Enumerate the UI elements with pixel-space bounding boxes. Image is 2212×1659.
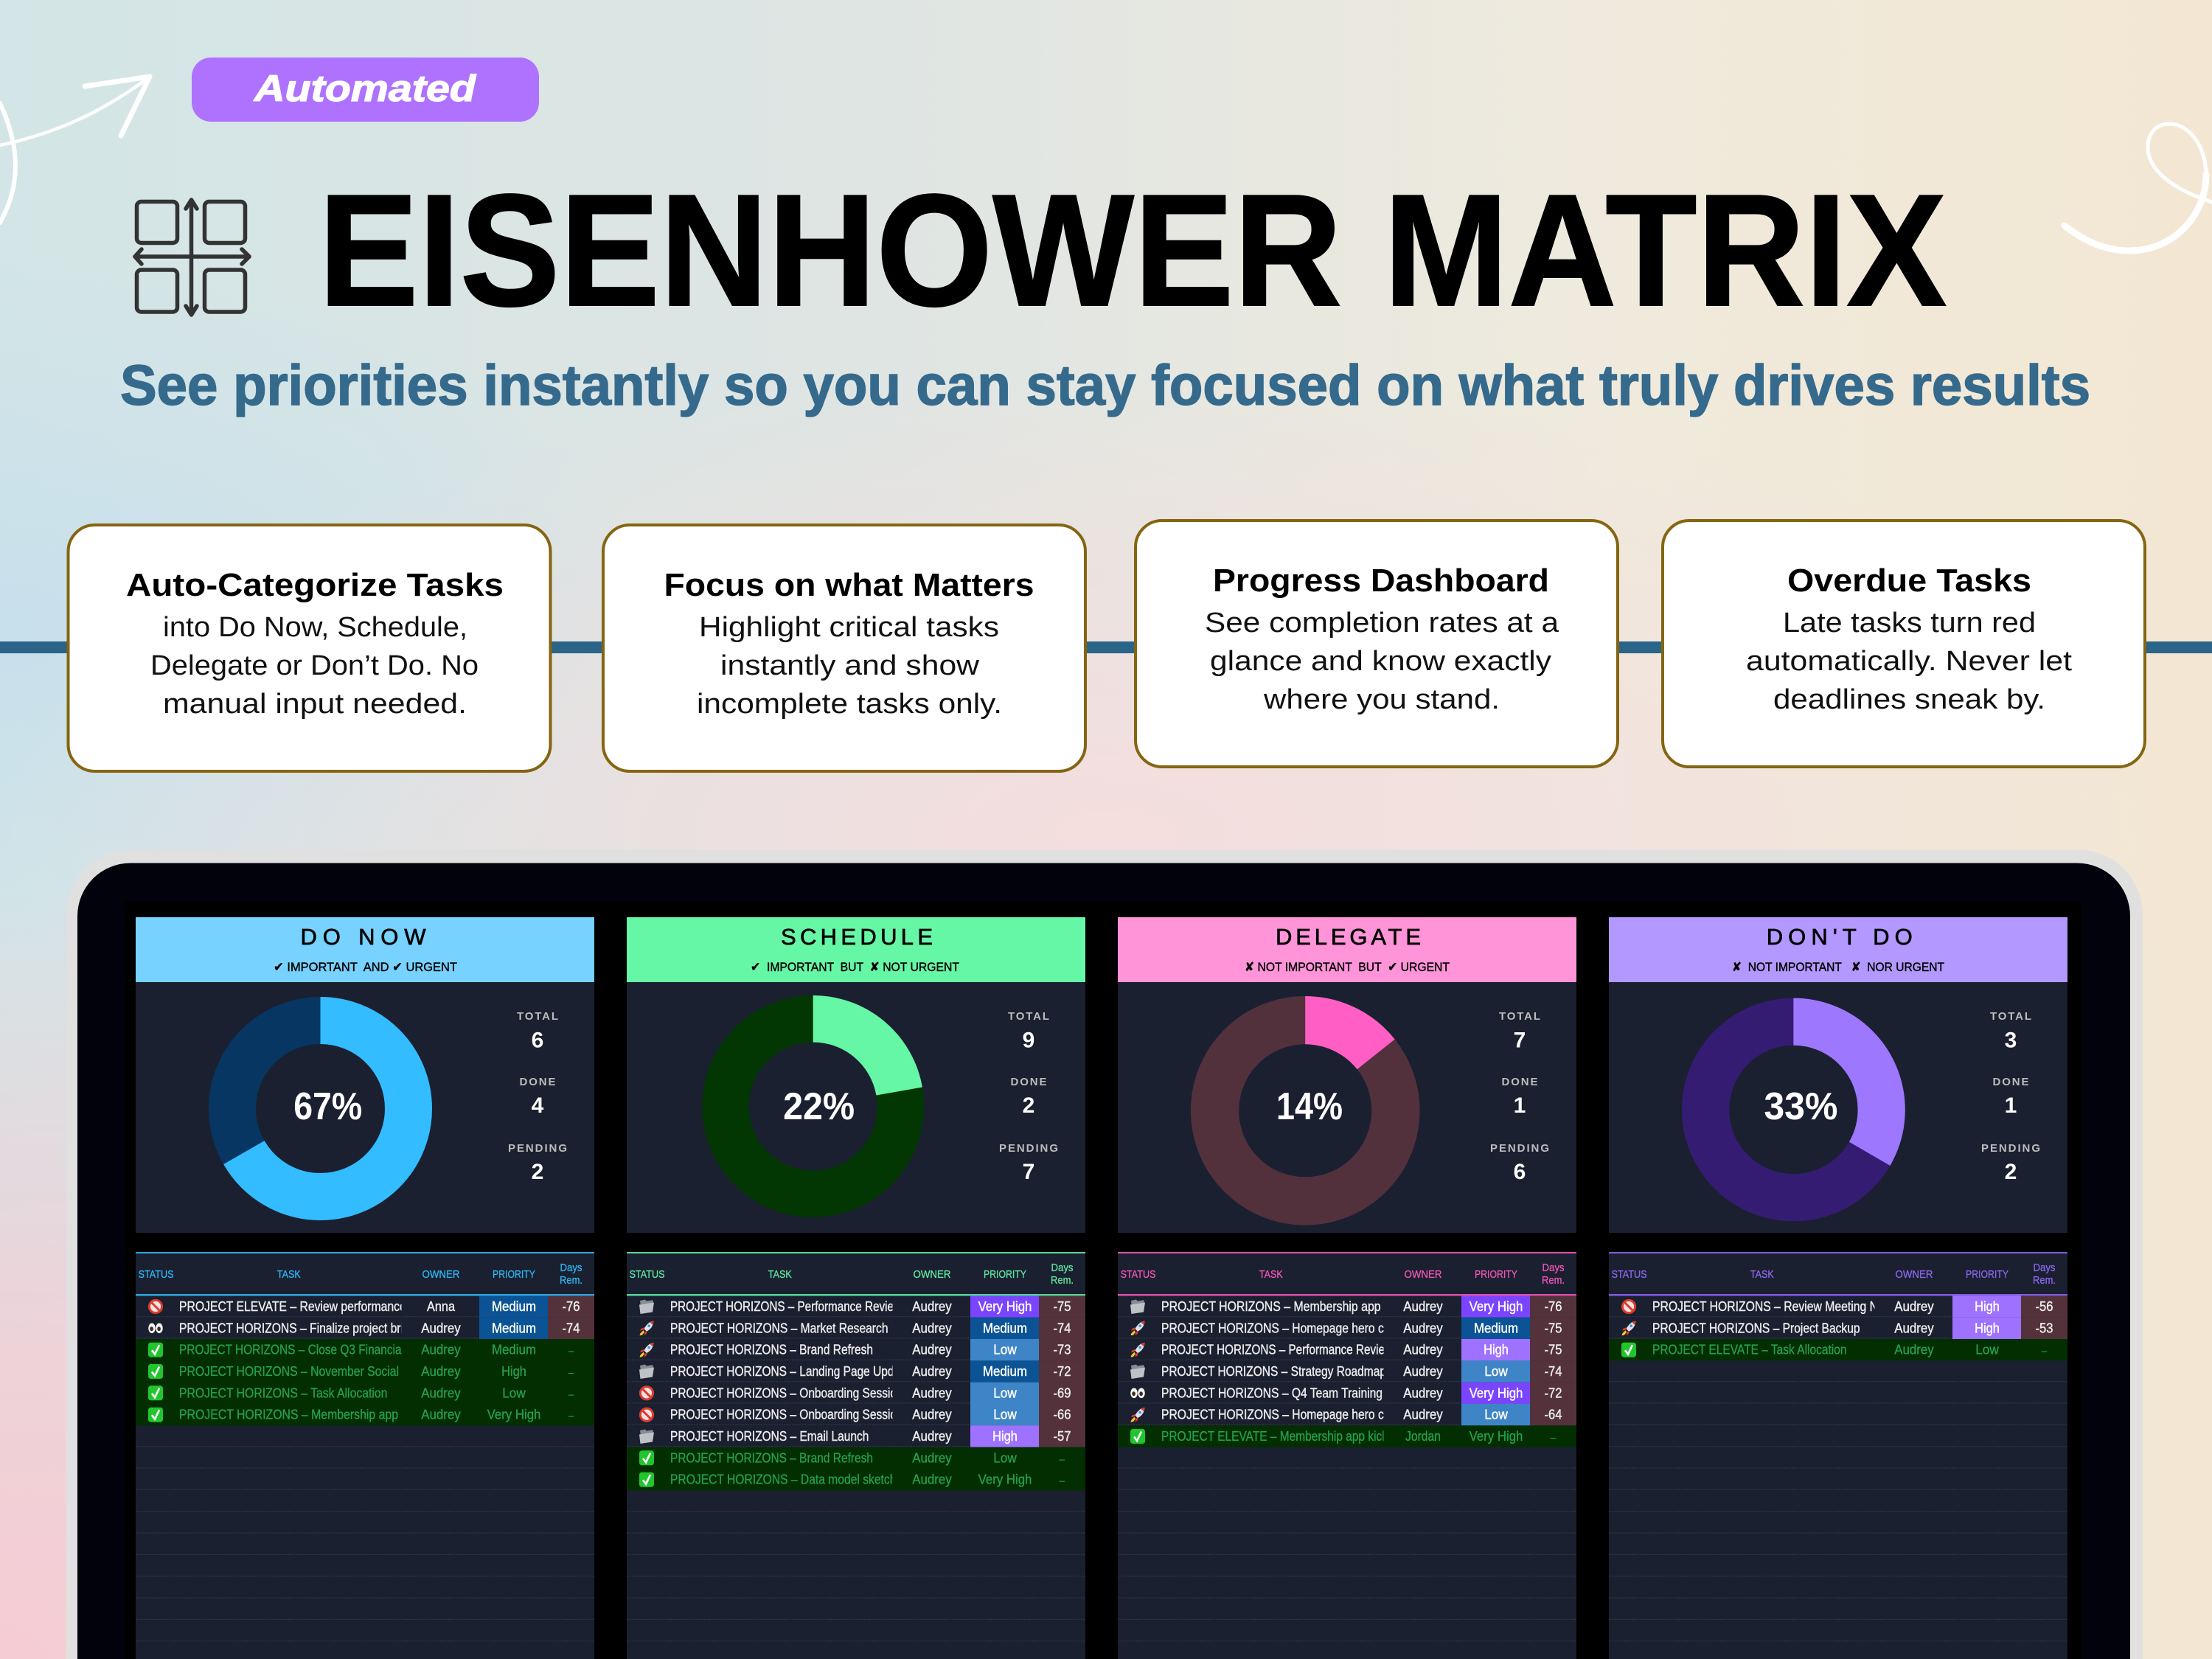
stats: totals: 2	[1023, 1093, 1034, 1118]
row: Task Allocation (done)	[1609, 1339, 2067, 1360]
header: DO NOW	[136, 917, 594, 982]
row: Close Q3 Financial (done)	[136, 1339, 594, 1360]
icon: folder	[639, 1364, 654, 1379]
stats: totals	[999, 1010, 1058, 1184]
chart: donut 14 percent: 14%	[1276, 1085, 1343, 1128]
header: DELEGATE	[1118, 917, 1576, 982]
row: Q4 Team Training: -72	[1544, 1385, 1562, 1400]
row: Onboarding Session 2: Audrey	[912, 1408, 952, 1422]
chart: donut 33 percent	[1705, 1022, 1882, 1197]
row: Onboarding Session: -69	[1053, 1385, 1071, 1400]
row: Data model sketch (done): Very High	[978, 1472, 1032, 1487]
row: Task Allocation (done)	[136, 1382, 594, 1404]
icon: check	[1130, 1429, 1145, 1444]
row: Q4 Team Training: PROJECT HORIZONS – Q4 Team Training	[1161, 1385, 1382, 1400]
table header row: TASK	[768, 1269, 792, 1281]
row: Performance Review: Audrey	[912, 1299, 952, 1314]
stats: totals: TOTAL	[517, 1010, 558, 1023]
row: Task Allocation (done): PROJECT ELEVATE – Task Allocation	[1652, 1343, 1846, 1357]
row: Brand Refresh (done): Low	[993, 1450, 1018, 1465]
row: Review performance: Medium	[492, 1299, 536, 1314]
table header row: STATUS	[1121, 1269, 1156, 1281]
row: Finalize project brief: PROJECT HORIZONS – Finalize project bri	[179, 1321, 403, 1335]
stats: totals: PENDING	[508, 1142, 567, 1155]
row: Membership app: -76	[1544, 1299, 1562, 1314]
row: Onboarding Session: Audrey	[912, 1385, 952, 1400]
row: Membership app: Very High	[1470, 1299, 1523, 1314]
row: Project Backup: Audrey	[1894, 1321, 1934, 1335]
row: Close Q3 Financial (done): –	[568, 1346, 574, 1357]
row: Review performance: Anna	[427, 1299, 456, 1314]
table header row: PRIORITY	[1966, 1269, 2008, 1281]
row: Data model sketch (done): –	[1060, 1475, 1065, 1486]
table header row	[1121, 1262, 1565, 1287]
card: Overdue Tasks: automatically. Never let	[1746, 646, 2072, 677]
row: Membership app kick (done): Very High	[1470, 1429, 1523, 1444]
icon: rocket	[640, 1343, 653, 1357]
row: Market Research: PROJECT HORIZONS – Market Research	[670, 1321, 888, 1335]
row: Performance Review	[639, 1295, 1085, 1318]
row: Performance Review: PROJECT HORIZONS – Performance Review	[670, 1299, 902, 1314]
row: Performance Review: PROJECT HORIZONS – Performance Review	[1161, 1343, 1394, 1357]
panel: DELEGATE quadrant	[1118, 917, 1576, 1659]
row: Homepage hero 2: PROJECT HORIZONS – Homepage hero c	[1161, 1408, 1384, 1422]
table header row: Days	[2034, 1262, 2056, 1274]
row: Data model sketch (done): Audrey	[912, 1472, 952, 1487]
row: Close Q3 Financial (done): Audrey	[421, 1343, 461, 1357]
row: Task Allocation (done): PROJECT HORIZONS – Task Allocation	[179, 1385, 387, 1400]
stats: totals	[508, 1010, 567, 1184]
row: Membership app (done): –	[568, 1411, 574, 1422]
table header row: STATUS	[139, 1269, 174, 1281]
table header row: TASK	[277, 1269, 301, 1281]
stats: totals: DONE	[1992, 1076, 2029, 1088]
row: Finalize project brief: Audrey	[421, 1321, 461, 1335]
row: Review Meeting: PROJECT HORIZONS – Review Meeting N	[1652, 1299, 1878, 1314]
chart: donut 67 percent	[232, 1020, 408, 1197]
title: EISENHOWER MATRIX	[319, 161, 1947, 339]
table: DON'T DO tasks	[1609, 1252, 2067, 1659]
table header row	[139, 1262, 582, 1287]
card: Auto-Categorize Tasks: Auto-Categorize Tasks	[126, 567, 504, 603]
row: Review Meeting: High	[1975, 1299, 2000, 1314]
row: Project Backup: -53	[2035, 1321, 2053, 1335]
row: Brand Refresh: -73	[1053, 1343, 1071, 1357]
chart: donut 33 percent: 33%	[1764, 1085, 1837, 1128]
stats: totals: DONE	[1501, 1076, 1538, 1088]
connector line behind feature cards	[0, 641, 2212, 653]
icon: check	[148, 1364, 163, 1379]
chart: donut 67 percent: 67%	[293, 1085, 362, 1128]
row: Task Allocation (done): Low	[1975, 1343, 2000, 1357]
row: Homepage hero: -75	[1544, 1321, 1562, 1335]
icon: check	[639, 1472, 654, 1487]
icon: rocket	[640, 1321, 653, 1335]
row: Landing Page Update: -72	[1053, 1364, 1071, 1379]
icon: check	[639, 1450, 654, 1465]
row: Finalize project brief	[148, 1318, 594, 1339]
row: Membership app	[1130, 1295, 1576, 1318]
card: Auto-Categorize Tasks: Delegate or Don’t Do. No	[150, 650, 479, 681]
row: Email Launch: Audrey	[912, 1429, 952, 1444]
header: DELEGATE: ✘ NOT IMPORTANT BUT ✔ URGENT	[1245, 960, 1450, 974]
stats: totals: TOTAL	[1499, 1010, 1540, 1023]
chart: donut 22 percent: 22%	[783, 1085, 855, 1128]
row: Strategy Roadmap: -74	[1544, 1364, 1562, 1379]
table header row: Days	[1543, 1262, 1565, 1274]
row: Homepage hero 2	[1131, 1404, 1576, 1425]
card: Progress Dashboard	[1135, 521, 1618, 767]
row: Review Meeting: -56	[2035, 1299, 2053, 1314]
card: Progress Dashboard: where you stand.	[1263, 684, 1500, 715]
chart: donut 22 percent	[726, 1019, 900, 1194]
row: Membership app (done): PROJECT HORIZONS – Membership app	[179, 1408, 398, 1422]
row: Project Backup: High	[1975, 1321, 2000, 1335]
stats: totals: 7	[1023, 1160, 1034, 1184]
row: Onboarding Session: Low	[993, 1385, 1018, 1400]
row: Strategy Roadmap: PROJECT HORIZONS – Strategy Roadmap	[1161, 1364, 1386, 1379]
row: Review performance: PROJECT ELEVATE – Review performance	[179, 1299, 406, 1314]
row: Email Launch: PROJECT HORIZONS – Email Launch	[670, 1429, 869, 1444]
stats: totals: 1	[1514, 1093, 1526, 1118]
badge: Automated	[192, 58, 539, 122]
row: Brand Refresh: Low	[993, 1343, 1018, 1357]
row: Performance Review: -75	[1544, 1343, 1562, 1357]
row: November Social (done): PROJECT HORIZONS – November Social	[179, 1364, 399, 1379]
table header row: OWNER	[1895, 1269, 1933, 1281]
stats: totals: 2	[532, 1160, 543, 1184]
card: Progress Dashboard: Progress Dashboard	[1213, 563, 1549, 599]
panel: DON'T DO quadrant	[1609, 917, 2067, 1659]
badge: Automated: Automated	[253, 68, 477, 109]
table header row: PRIORITY	[984, 1269, 1026, 1281]
icon: folder	[1130, 1364, 1145, 1379]
table: SCHEDULE tasks	[627, 1252, 1085, 1659]
header: DO NOW: ✔ IMPORTANT AND ✔ URGENT	[274, 960, 457, 974]
stats: totals: 6	[1514, 1160, 1526, 1184]
row: November Social (done)	[136, 1360, 594, 1382]
row: Performance Review: Very High	[978, 1299, 1032, 1314]
table: DO NOW tasks	[136, 1252, 594, 1659]
table header row: Rem.	[560, 1275, 582, 1287]
row: Homepage hero	[1131, 1318, 1576, 1339]
stats: totals: 6	[532, 1028, 543, 1053]
row: Homepage hero: Medium	[1474, 1321, 1518, 1335]
panel: feature cards	[68, 521, 2145, 771]
header: SCHEDULE: ✔ IMPORTANT BUT ✘ NOT URGENT	[751, 960, 959, 974]
table header row: STATUS	[1612, 1269, 1647, 1281]
row: November Social (done): High	[501, 1364, 526, 1379]
row: Membership app: Audrey	[1403, 1299, 1443, 1314]
row: Performance Review: Audrey	[1403, 1343, 1443, 1357]
row: Brand Refresh: PROJECT HORIZONS – Brand Refresh	[670, 1343, 873, 1357]
header: SCHEDULE	[627, 917, 1085, 982]
header: DON'T DO	[1609, 917, 2067, 982]
table header row: Days	[560, 1262, 582, 1274]
row: Landing Page Update: Medium	[983, 1364, 1027, 1379]
table header row: OWNER	[1404, 1269, 1442, 1281]
row: Onboarding Session 2: PROJECT HORIZONS – Onboarding Sessio	[670, 1408, 897, 1422]
row: Landing Page Update: Audrey	[912, 1364, 952, 1379]
row: Membership app kick (done)	[1118, 1425, 1576, 1447]
icon: rocket	[1131, 1408, 1144, 1422]
row: Homepage hero 2: Low	[1484, 1408, 1509, 1422]
row: Review performance: -76	[562, 1299, 580, 1314]
row: Performance Review	[1131, 1339, 1576, 1360]
row: Finalize project brief: -74	[562, 1321, 580, 1335]
row: Email Launch	[639, 1425, 1085, 1447]
row: Q4 Team Training	[1130, 1382, 1576, 1404]
table header row: OWNER	[422, 1269, 460, 1281]
row: Project Backup: PROJECT HORIZONS – Project Backup	[1652, 1321, 1860, 1335]
row: November Social (done): –	[568, 1367, 574, 1378]
row: Membership app kick (done): Jordan	[1405, 1429, 1441, 1444]
table header row: Rem.	[1051, 1275, 1074, 1287]
row: Membership app (done): Audrey	[421, 1408, 461, 1422]
row: Onboarding Session: PROJECT HORIZONS – Onboarding Sessio	[670, 1385, 897, 1400]
header: DON'T DO: ✘ NOT IMPORTANT ✘ NOR URGENT	[1732, 960, 1944, 974]
table header row: Rem.	[2033, 1275, 2056, 1287]
icon: rocket	[1131, 1343, 1144, 1357]
card: Overdue Tasks	[1663, 521, 2145, 767]
row: Review performance	[149, 1295, 594, 1318]
row: Homepage hero 2: -64	[1544, 1408, 1562, 1422]
row: Review Meeting: Audrey	[1894, 1299, 1934, 1314]
table header row: PRIORITY	[1475, 1269, 1517, 1281]
table header row: Rem.	[1542, 1275, 1565, 1287]
panel: dashboard device frame	[66, 849, 2143, 1659]
icon: four-quadrant matrix	[135, 200, 249, 315]
row: Membership app kick (done): –	[1551, 1432, 1557, 1443]
card: Auto-Categorize Tasks	[68, 525, 550, 771]
table: DELEGATE tasks	[1118, 1252, 1576, 1659]
row: Performance Review: High	[1484, 1343, 1509, 1357]
row: Performance Review: -75	[1053, 1299, 1071, 1314]
row: Q4 Team Training: Very High	[1470, 1385, 1523, 1400]
stats: totals: 1	[2005, 1093, 2017, 1118]
table header row	[1612, 1262, 2056, 1287]
panel: DO NOW quadrant	[136, 917, 594, 1659]
icon: no entry	[640, 1387, 653, 1399]
row: Task Allocation (done): –	[568, 1388, 574, 1399]
row: Homepage hero: Audrey	[1403, 1321, 1443, 1335]
subtitle: See priorities instantly so you can stay focused on what truly drives results	[120, 354, 2090, 417]
table header row: PRIORITY	[493, 1269, 535, 1281]
row: Strategy Roadmap: Low	[1484, 1364, 1509, 1379]
row: Landing Page Update: PROJECT HORIZONS – Landing Page Upd	[670, 1364, 894, 1379]
stats: totals: PENDING	[999, 1142, 1058, 1155]
row: Brand Refresh	[640, 1339, 1085, 1360]
card: Auto-Categorize Tasks: into Do Now, Schedule,	[163, 612, 467, 643]
row: Task Allocation (done): Audrey	[1894, 1343, 1934, 1357]
row: Email Launch: -57	[1053, 1429, 1071, 1444]
stats: totals: PENDING	[1981, 1142, 2040, 1155]
icon: check	[1621, 1343, 1636, 1357]
card: Focus on what Matters	[603, 525, 1085, 771]
icon: check	[148, 1408, 163, 1422]
card: Progress Dashboard: glance and know exactly	[1210, 646, 1551, 677]
row: Task Allocation (done): Low	[502, 1385, 526, 1400]
decorative curl: top right doodle	[2065, 124, 2212, 251]
row: Brand Refresh (done): PROJECT HORIZONS – Brand Refresh	[670, 1450, 873, 1465]
table header row: TASK	[1259, 1269, 1283, 1281]
row: Close Q3 Financial (done): PROJECT HORIZONS – Close Q3 Financial	[179, 1343, 404, 1357]
row: Onboarding Session 2: -66	[1053, 1408, 1071, 1422]
row: Data model sketch (done): PROJECT HORIZONS – Data model sketch	[670, 1472, 896, 1487]
icon: folder	[1130, 1299, 1145, 1314]
row: Strategy Roadmap: Audrey	[1403, 1364, 1443, 1379]
icon: rocket	[1131, 1321, 1144, 1335]
row: November Social (done): Audrey	[421, 1364, 461, 1379]
card: Focus on what Matters: Highlight critical tasks	[699, 612, 999, 643]
table header row: Days	[1051, 1262, 1074, 1274]
card: Overdue Tasks: deadlines sneak by.	[1773, 684, 2045, 715]
icon: rocket	[1622, 1321, 1635, 1335]
row: Task Allocation (done): Audrey	[421, 1385, 461, 1400]
stats: totals	[1981, 1010, 2040, 1184]
table header row	[630, 1262, 1074, 1287]
header: DO NOW: DO NOW	[301, 924, 426, 950]
table header row: STATUS	[630, 1269, 665, 1281]
card: Focus on what Matters: Focus on what Matters	[664, 567, 1034, 603]
row: Membership app (done): Very High	[487, 1408, 540, 1422]
header: DON'T DO: DON'T DO	[1767, 924, 1913, 950]
header: DELEGATE: DELEGATE	[1276, 924, 1421, 950]
row: Landing Page Update	[639, 1360, 1085, 1382]
chart: donut 14 percent	[1215, 1020, 1396, 1201]
row: Task Allocation (done): –	[2042, 1346, 2048, 1357]
card: Auto-Categorize Tasks: manual input needed.	[163, 689, 467, 720]
stats: totals: 9	[1023, 1028, 1034, 1053]
icon: folder	[639, 1299, 654, 1314]
row: Market Research: Medium	[983, 1321, 1027, 1335]
row: Market Research: Audrey	[912, 1321, 952, 1335]
icon: check	[148, 1385, 163, 1400]
row: Market Research: -74	[1053, 1321, 1071, 1335]
card: Focus on what Matters: incomplete tasks only.	[697, 689, 1002, 720]
decorative arrow: top left doodle	[0, 77, 150, 223]
card: Overdue Tasks: Overdue Tasks	[1787, 563, 2031, 599]
card: Progress Dashboard: See completion rates at a	[1205, 608, 1559, 639]
stats: totals: TOTAL	[1008, 1010, 1049, 1023]
row: Onboarding Session 2: Low	[993, 1408, 1018, 1422]
card: Overdue Tasks: Late tasks turn red	[1783, 608, 2036, 639]
row: Market Research	[640, 1318, 1085, 1339]
stats: totals: 2	[2005, 1160, 2017, 1184]
stats: totals: 3	[2005, 1028, 2017, 1053]
stats: totals: 4	[532, 1093, 544, 1118]
stats: totals	[1490, 1010, 1549, 1184]
icon: no entry	[1622, 1300, 1635, 1313]
icon: folder	[639, 1429, 654, 1444]
stats: totals: TOTAL	[1990, 1010, 2031, 1023]
card: Focus on what Matters: instantly and show	[720, 650, 980, 681]
stats: totals: 7	[1514, 1028, 1526, 1053]
table header row: OWNER	[913, 1269, 951, 1281]
row: Membership app (done)	[136, 1404, 594, 1425]
row: Membership app: PROJECT HORIZONS – Membership app	[1161, 1299, 1381, 1314]
row: Data model sketch (done)	[627, 1469, 1085, 1490]
row: Brand Refresh (done): –	[1060, 1453, 1065, 1464]
row: Q4 Team Training: Audrey	[1403, 1385, 1443, 1400]
row: Homepage hero: PROJECT HORIZONS – Homepage hero c	[1161, 1321, 1384, 1335]
row: Brand Refresh: Audrey	[912, 1343, 952, 1357]
row: Finalize project brief: Medium	[492, 1321, 536, 1335]
stats: totals: DONE	[1010, 1076, 1047, 1088]
header: SCHEDULE: SCHEDULE	[781, 924, 933, 950]
table header row: TASK	[1750, 1269, 1774, 1281]
row: Brand Refresh (done)	[627, 1447, 1085, 1469]
row: Membership app kick (done): PROJECT ELEVATE – Membership app kick	[1161, 1429, 1388, 1444]
row: Onboarding Session 2	[640, 1404, 1085, 1425]
row: Homepage hero 2: Audrey	[1403, 1408, 1443, 1422]
icon: eyes	[148, 1323, 163, 1333]
row: Project Backup	[1622, 1318, 2067, 1339]
row: Strategy Roadmap	[1130, 1360, 1576, 1382]
icon: eyes	[1130, 1388, 1145, 1398]
icon: no entry	[640, 1408, 653, 1421]
panel: SCHEDULE quadrant	[627, 917, 1085, 1659]
icon: check	[148, 1343, 163, 1357]
icon: no entry	[149, 1300, 162, 1313]
stats: totals: PENDING	[1490, 1142, 1549, 1155]
row: Email Launch: High	[992, 1429, 1018, 1444]
row: Review Meeting	[1622, 1295, 2067, 1318]
row: Brand Refresh (done): Audrey	[912, 1450, 952, 1465]
stats: totals: DONE	[519, 1076, 556, 1088]
row: Close Q3 Financial (done): Medium	[492, 1343, 536, 1357]
row: Onboarding Session	[640, 1382, 1085, 1404]
